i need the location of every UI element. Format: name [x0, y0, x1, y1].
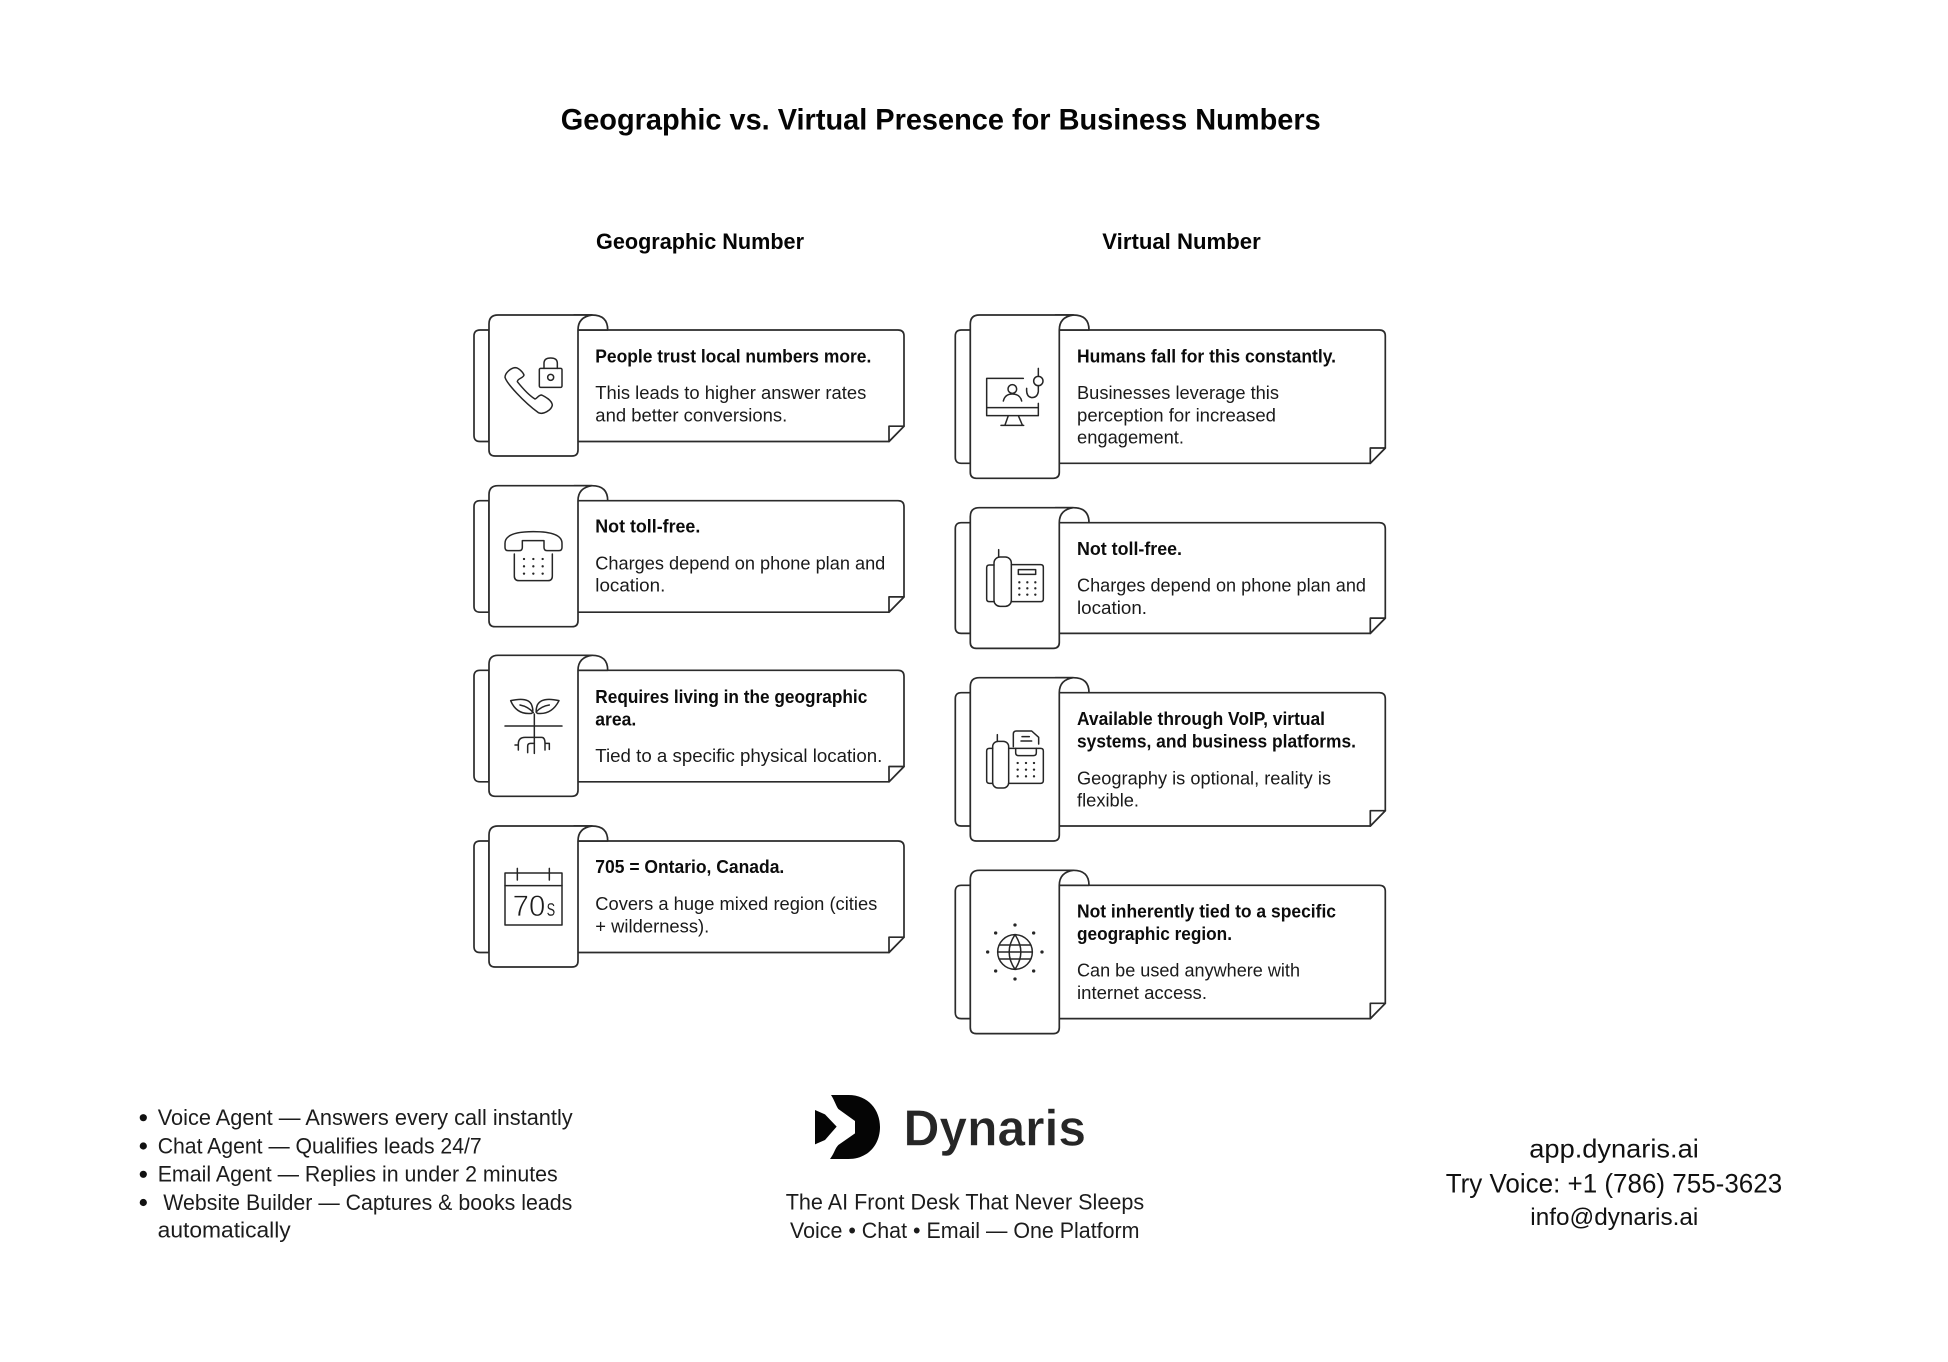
panel: geographic card 2: location.	[595, 576, 665, 596]
panel: geographic card 3	[474, 655, 904, 796]
title: Geographic vs. Virtual Presence for Business Numbers	[561, 103, 1321, 136]
panel: geographic card 3: area.	[595, 709, 636, 729]
icon: monitor with person and hook	[987, 368, 1043, 425]
panel: virtual card 1: Humans fall for this constantly.	[1077, 346, 1336, 366]
panel: virtual card 4: Not inherently tied to a specific	[1077, 902, 1336, 922]
panel: geographic card 4: + wilderness).	[595, 916, 709, 936]
icon: calendar 70s: s	[547, 895, 555, 922]
panel: geographic card 4: 705 = Ontario, Canada.	[595, 857, 784, 877]
icon: phone with lock	[505, 358, 562, 413]
panel: virtual card 2: Charges depend on phone plan and	[1077, 576, 1366, 596]
panel: geographic card 3: Tied to a specific physical location.	[595, 746, 882, 766]
text block: product list: Website Builder — Captures & books leads	[163, 1190, 572, 1215]
panel: virtual card 1: perception for increased	[1077, 405, 1276, 425]
text block: product list: automatically	[158, 1217, 291, 1242]
panel: geographic card 1	[474, 315, 904, 456]
panel: virtual card 1	[955, 315, 1385, 478]
icon: Dynaris mark	[815, 1095, 880, 1159]
panel: geographic card 4	[474, 826, 904, 967]
panel: virtual card 2: location.	[1077, 598, 1147, 618]
panel: virtual card 1: Businesses leverage this	[1077, 383, 1279, 403]
text block: contact details: app.dynaris.ai	[1529, 1134, 1699, 1164]
icon: calendar 70s: 70	[513, 890, 545, 923]
panel: virtual card 2: Not toll-free.	[1077, 539, 1182, 559]
heading: geographic number column: Geographic Number	[596, 229, 804, 254]
text block: contact details: Try Voice: +1 (786) 755-3623	[1446, 1169, 1782, 1199]
panel: virtual card 3: Geography is optional, reality is	[1077, 768, 1331, 788]
panel: geographic card 1: and better conversions.	[595, 405, 787, 425]
logo: Dynaris: Dynaris	[904, 1100, 1086, 1157]
heading: virtual number column: Virtual Number	[1102, 229, 1261, 254]
text block: contact details: info@dynaris.ai	[1530, 1204, 1698, 1231]
panel: geographic card 2: Not toll-free.	[595, 517, 700, 537]
text block: product list: Email Agent — Replies in under 2 minutes	[158, 1162, 558, 1187]
icon: desk telephone	[505, 532, 562, 581]
text block: contact details	[1446, 1134, 1782, 1231]
panel: virtual card 4: Can be used anywhere with	[1077, 961, 1300, 981]
panel: virtual card 4: geographic region.	[1077, 924, 1232, 944]
panel: virtual card 3	[955, 678, 1385, 841]
panel: virtual card 4: internet access.	[1077, 983, 1207, 1003]
panel: geographic card 2	[474, 486, 904, 627]
text block: tagline	[786, 1189, 1144, 1243]
icon: fax machine	[987, 731, 1043, 788]
icon: calendar 70s	[505, 868, 562, 925]
panel: geographic card 1: This leads to higher answer rates	[595, 383, 866, 403]
panel: virtual card 1: engagement.	[1077, 428, 1184, 448]
text block: tagline: Voice • Chat • Email — One Platform	[790, 1218, 1140, 1243]
panel: geographic card 2: Charges depend on phone plan and	[595, 553, 885, 573]
panel: geographic card 3: Requires living in the geographic	[595, 687, 867, 707]
text block: product list: Chat Agent — Qualifies leads 24/7	[158, 1133, 482, 1158]
icon: sprout with roots	[505, 699, 562, 753]
text block: product list: Voice Agent — Answers every call instantly	[158, 1105, 573, 1130]
panel: virtual card 3: Available through VoIP, virtual	[1077, 709, 1325, 729]
text block: tagline: The AI Front Desk That Never Sleeps	[786, 1189, 1144, 1214]
icon: office phone	[987, 550, 1043, 606]
panel: geographic card 1: People trust local numbers more.	[595, 346, 871, 366]
panel: virtual card 4	[955, 870, 1385, 1034]
text block: product list	[140, 1105, 573, 1242]
logo: Dynaris	[815, 1095, 1086, 1159]
panel: virtual card 2	[955, 508, 1385, 648]
icon: globe with dots	[986, 923, 1044, 981]
panel: virtual card 3: systems, and business platforms.	[1077, 731, 1356, 751]
panel: virtual card 3: flexible.	[1077, 791, 1139, 811]
panel: geographic card 4: Covers a huge mixed region (cities	[595, 894, 877, 914]
